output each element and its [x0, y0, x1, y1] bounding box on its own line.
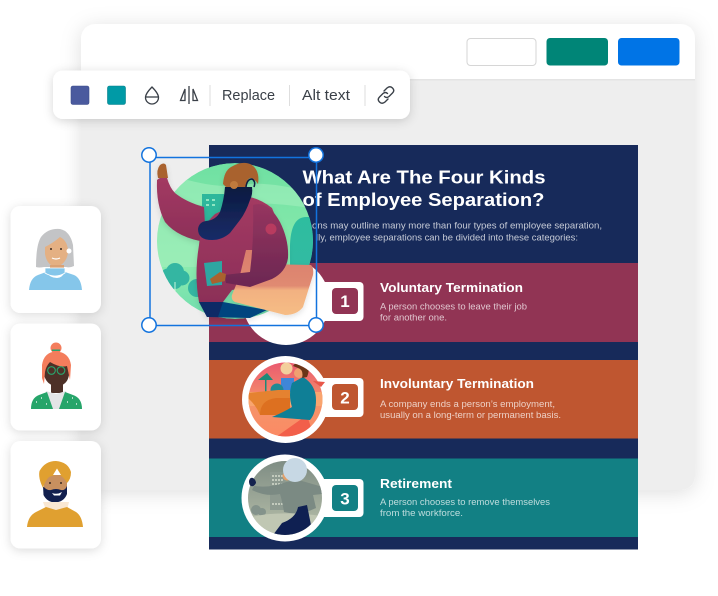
- colour swatch: teal: [108, 86, 126, 104]
- floating toolbar: [53, 70, 410, 119]
- band 2: involuntary termination: A company ends a person’s employment,: [380, 399, 555, 409]
- avatar card: man with yellow turban: [10, 441, 101, 548]
- band 1: voluntary termination: for another one.: [380, 312, 447, 322]
- avatar card: woman with orange headscarf: [10, 324, 101, 430]
- band 3: retirement: 3: [340, 490, 350, 508]
- selection box and handles: [142, 148, 323, 332]
- band 1: voluntary termination: 1: [340, 292, 350, 311]
- editor window: [81, 24, 695, 490]
- poster title: [302, 166, 546, 210]
- green button: [546, 38, 608, 66]
- band 2: involuntary termination: Involuntary Termination: [380, 377, 534, 391]
- illustration: retiree: [248, 458, 323, 535]
- replace label: Replace: [222, 88, 275, 104]
- illustration: person with moving box: [248, 361, 325, 437]
- band 3: retirement: [209, 454, 638, 542]
- avatar card: grey-haired woman: [10, 206, 101, 313]
- infographic poster: [209, 145, 638, 550]
- icon: opacity drop: [146, 87, 158, 104]
- bearded man: [157, 163, 313, 318]
- band 2: involuntary termination: usually on a long-term or permanent basis.: [380, 410, 561, 420]
- band 3: retirement: from the workforce.: [380, 508, 463, 518]
- poster title: of Employee Separation?: [302, 189, 544, 210]
- selected hero illustration: [157, 163, 320, 320]
- icon: link: [378, 87, 394, 103]
- band 1: voluntary termination: Voluntary Termination: [380, 281, 523, 295]
- poster title: What Are The Four Kinds: [302, 166, 546, 188]
- alt text label: Alt text: [302, 88, 350, 104]
- outline button: [467, 38, 536, 66]
- band 1: voluntary termination: [209, 258, 638, 345]
- band 3: retirement: A person chooses to remove themselves: [380, 497, 551, 507]
- blue button: [618, 38, 680, 66]
- colour swatch: indigo: [71, 86, 89, 104]
- band 1: voluntary termination: A person chooses to leave their job: [380, 302, 527, 312]
- green background circle: [157, 163, 320, 320]
- poster intro text: lly, employee separations can be divided into these categories:: [316, 232, 578, 244]
- band 2: involuntary termination: [209, 356, 638, 443]
- icon: flip: [180, 86, 198, 104]
- poster intro text: ons may outline many more than four types of employee separation,: [312, 220, 602, 232]
- poster intro text: [312, 220, 602, 244]
- band 3: retirement: Retirement: [380, 477, 453, 491]
- band 2: involuntary termination: 2: [340, 388, 350, 408]
